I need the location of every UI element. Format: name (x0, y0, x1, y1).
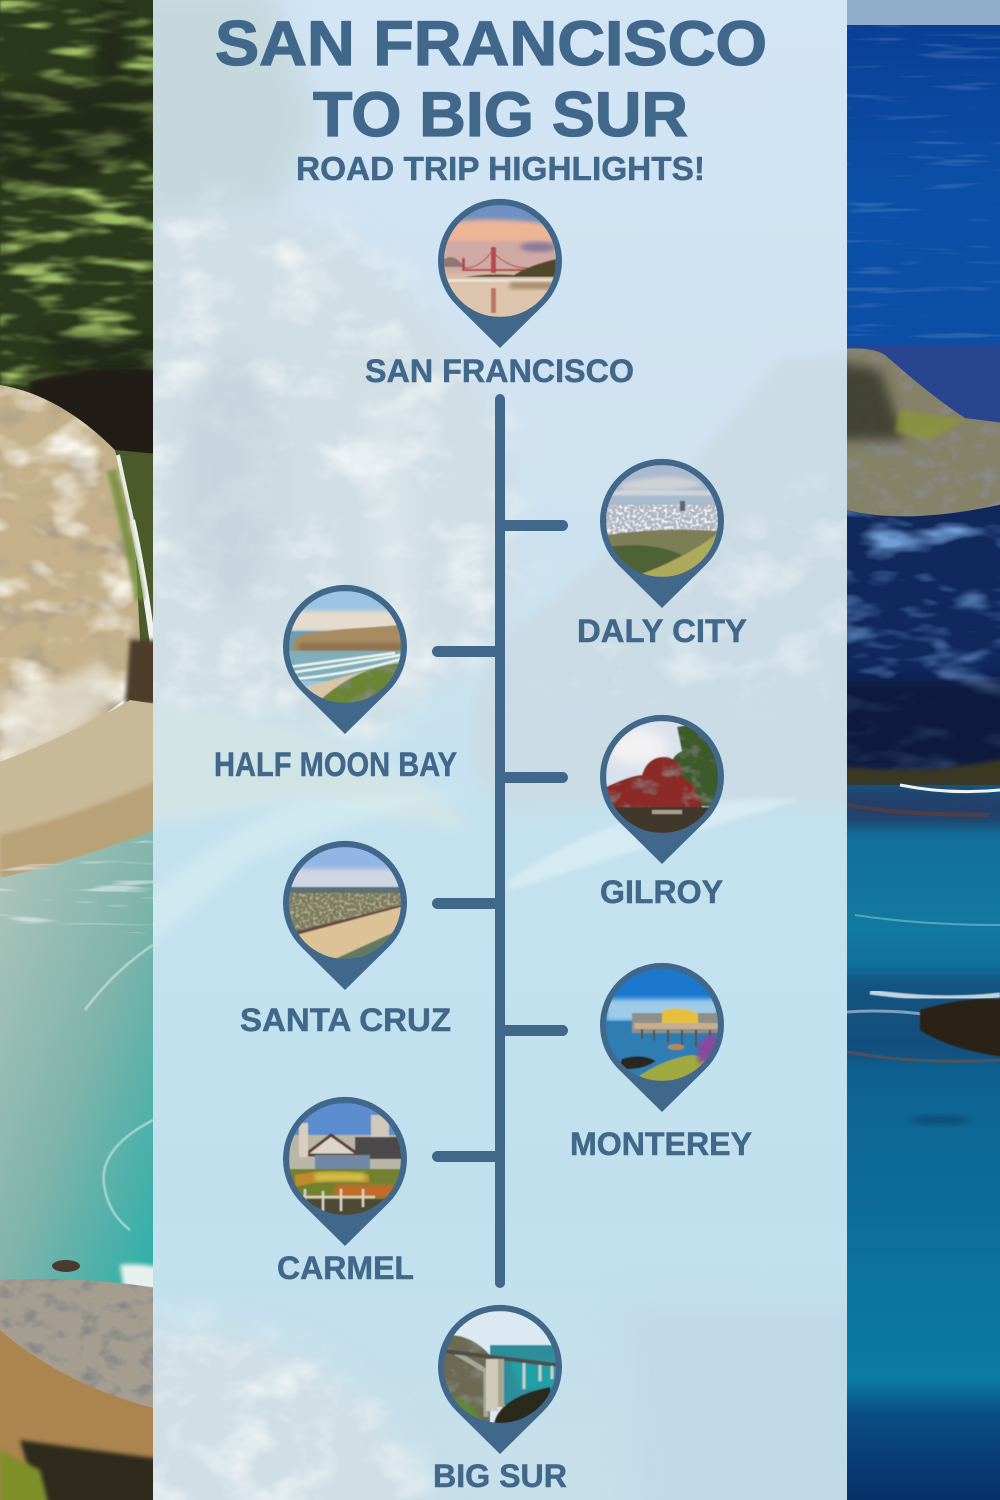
label: MONTEREY (570, 1126, 752, 1162)
stop: Carmel (277, 1097, 414, 1286)
label: DALY CITY (577, 613, 747, 649)
label: CARMEL (277, 1250, 414, 1286)
stop: San Francisco (365, 199, 634, 389)
pin marker (283, 1097, 407, 1246)
stop: Santa Cruz (240, 841, 451, 1038)
title (215, 9, 767, 187)
translucent centre panel with faded photo (153, 0, 847, 1500)
label: SAN FRANCISCO (365, 353, 634, 389)
route timeline (432, 394, 568, 1288)
label: GILROY (600, 874, 723, 910)
photo: coastal cliffs and beach (289, 591, 401, 703)
photo: city skyline over green hills (606, 465, 718, 577)
pin marker (600, 459, 724, 608)
pin marker (283, 585, 407, 734)
photo: boardwalk and beach (289, 847, 401, 959)
label: SANTA CRUZ (240, 1002, 451, 1038)
stop: Half Moon Bay (214, 585, 457, 784)
pin marker (600, 963, 724, 1112)
stop: Big Sur (433, 1305, 567, 1494)
photo: wharf on blue bay (606, 969, 718, 1081)
photo: Bixby Bridge (444, 1311, 556, 1423)
pin marker (438, 1305, 562, 1454)
pin marker (438, 199, 562, 348)
left photo strip: waterfall beach (0, 0, 153, 1500)
stop: Daly City (577, 459, 747, 649)
photo: cottage and flower garden (289, 1103, 401, 1215)
subtitle: ROAD TRIP HIGHLIGHTS! (296, 150, 705, 187)
stop: Monterey (570, 963, 752, 1162)
photo: red autumn trees (606, 721, 718, 833)
pin marker (600, 715, 724, 864)
label: HALF MOON BAY (214, 746, 457, 784)
photo: Golden Gate Bridge at sunset (444, 205, 556, 317)
title line 2: TO BIG SUR (313, 80, 688, 150)
label: BIG SUR (433, 1458, 567, 1494)
right photo strip: ocean and headland (847, 0, 1000, 1500)
title line 1: SAN FRANCISCO (215, 9, 767, 79)
stop: Gilroy (600, 715, 724, 910)
pin marker (283, 841, 407, 990)
